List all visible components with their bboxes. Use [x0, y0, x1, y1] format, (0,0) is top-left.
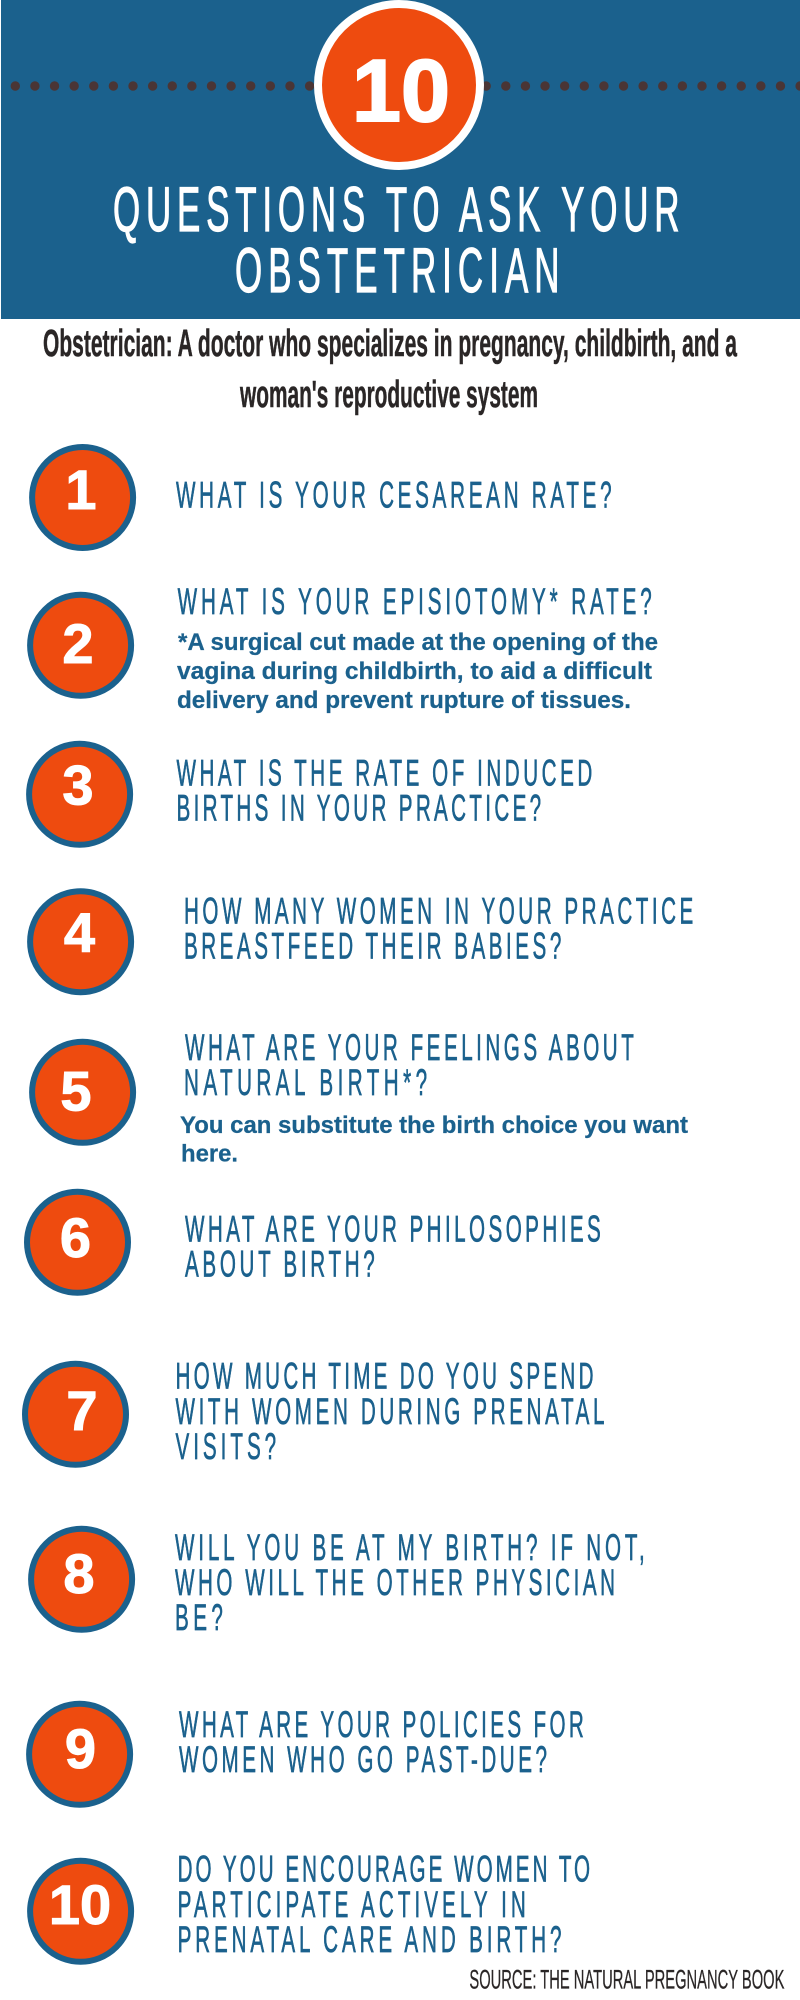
question 6 — [27, 1192, 601, 1293]
question 3 text: BIRTHS IN YOUR PRACTICE? — [176, 788, 541, 829]
question 1 — [32, 447, 612, 548]
badge: number 10: 10 — [352, 41, 450, 140]
question 7 — [25, 1356, 604, 1468]
question 2 note — [177, 629, 658, 714]
question 8 — [31, 1528, 645, 1639]
icon: number 8 badge — [31, 1529, 132, 1630]
title: QUESTIONS TO ASK YOUR — [113, 174, 680, 245]
question 2 note: delivery and prevent rupture of tissues. — [177, 687, 631, 714]
question 5 text: WHAT ARE YOUR FEELINGS ABOUT — [185, 1028, 634, 1069]
question 4 — [30, 891, 693, 992]
icon: number 6 badge — [27, 1192, 128, 1293]
question 10 — [30, 1849, 590, 1962]
icon: number 10 badge: 10 — [49, 1873, 111, 1936]
question 5 note: You can substitute the birth choice you want — [180, 1112, 688, 1139]
question 9 — [29, 1704, 584, 1805]
question 10 text: DO YOU ENCOURAGE WOMEN TO — [178, 1849, 590, 1890]
question 4 text: HOW MANY WOMEN IN YOUR PRACTICE — [184, 891, 693, 932]
icon: number 1 badge: 1 — [65, 458, 97, 521]
question 7 text: VISITS? — [176, 1427, 276, 1468]
icon: number 6 badge: 6 — [60, 1206, 91, 1269]
question 3 text — [176, 753, 592, 829]
question 3 text: WHAT IS THE RATE OF INDUCED — [176, 753, 592, 794]
panel: header banner — [1, 0, 800, 319]
icon: number 7 badge: 7 — [66, 1379, 98, 1442]
icon: number 4 badge: 4 — [64, 901, 95, 964]
question 9 text — [179, 1705, 584, 1781]
icon: number 3 badge — [29, 744, 130, 845]
question 6 text — [185, 1209, 601, 1285]
icon: number 3 badge: 3 — [62, 754, 94, 816]
question 2 note: *A surgical cut made at the opening of the — [178, 629, 658, 656]
question 7 text — [176, 1356, 604, 1468]
question 5 note — [180, 1112, 688, 1168]
title — [113, 174, 680, 306]
icon: number 2 badge: 2 — [62, 612, 94, 675]
question 3 — [29, 744, 592, 845]
question 6 text: ABOUT BIRTH? — [185, 1244, 375, 1285]
icon: number 5 badge — [32, 1042, 133, 1143]
question 5 — [32, 1028, 688, 1168]
icon: number 9 badge — [29, 1704, 130, 1805]
question 4 text: BREASTFEED THEIR BABIES? — [184, 926, 561, 967]
icon: number 9 badge: 9 — [65, 1717, 96, 1780]
question 2 — [30, 582, 658, 714]
question 7 text: HOW MUCH TIME DO YOU SPEND — [176, 1356, 594, 1397]
question 4 text — [184, 891, 693, 967]
question 9 text: WHAT ARE YOUR POLICIES FOR — [179, 1705, 584, 1746]
icon: number 10 badge — [30, 1861, 131, 1962]
question 8 text — [175, 1528, 645, 1639]
question 9 text: WOMEN WHO GO PAST-DUE? — [179, 1740, 547, 1781]
icon: number 5 badge: 5 — [60, 1060, 92, 1122]
question 10 text: PARTICIPATE ACTIVELY IN — [178, 1885, 526, 1926]
question 6 text: WHAT ARE YOUR PHILOSOPHIES — [185, 1209, 601, 1250]
question 5 text — [184, 1028, 634, 1104]
icon: number 8 badge: 8 — [63, 1542, 95, 1605]
question 2 note: vagina during childbirth, to aid a difficult — [177, 658, 652, 685]
icon: number 1 badge — [32, 447, 133, 548]
question 1 text: WHAT IS YOUR CESAREAN RATE? — [176, 475, 612, 516]
question 5 note: here. — [181, 1141, 238, 1168]
badge: number 10 — [318, 4, 480, 166]
question 2 text: WHAT IS YOUR EPISIOTOMY* RATE? — [178, 582, 652, 623]
question 8 text: WHO WILL THE OTHER PHYSICIAN — [175, 1563, 615, 1604]
question 5 text: NATURAL BIRTH*? — [184, 1063, 427, 1104]
icon: number 2 badge — [30, 595, 131, 696]
question 8 text: BE? — [175, 1598, 223, 1639]
definition text: woman's reproductive system — [239, 374, 538, 416]
title: OBSTETRICIAN — [235, 235, 560, 306]
question 7 text: WITH WOMEN DURING PRENATAL — [176, 1392, 605, 1433]
icon: number 7 badge — [25, 1364, 126, 1465]
question 10 text — [178, 1849, 590, 1961]
icon: number 4 badge — [30, 891, 131, 992]
question 8 text: WILL YOU BE AT MY BIRTH? IF NOT, — [175, 1528, 645, 1569]
question 10 text: PRENATAL CARE AND BIRTH? — [178, 1920, 561, 1961]
definition text — [43, 323, 737, 416]
